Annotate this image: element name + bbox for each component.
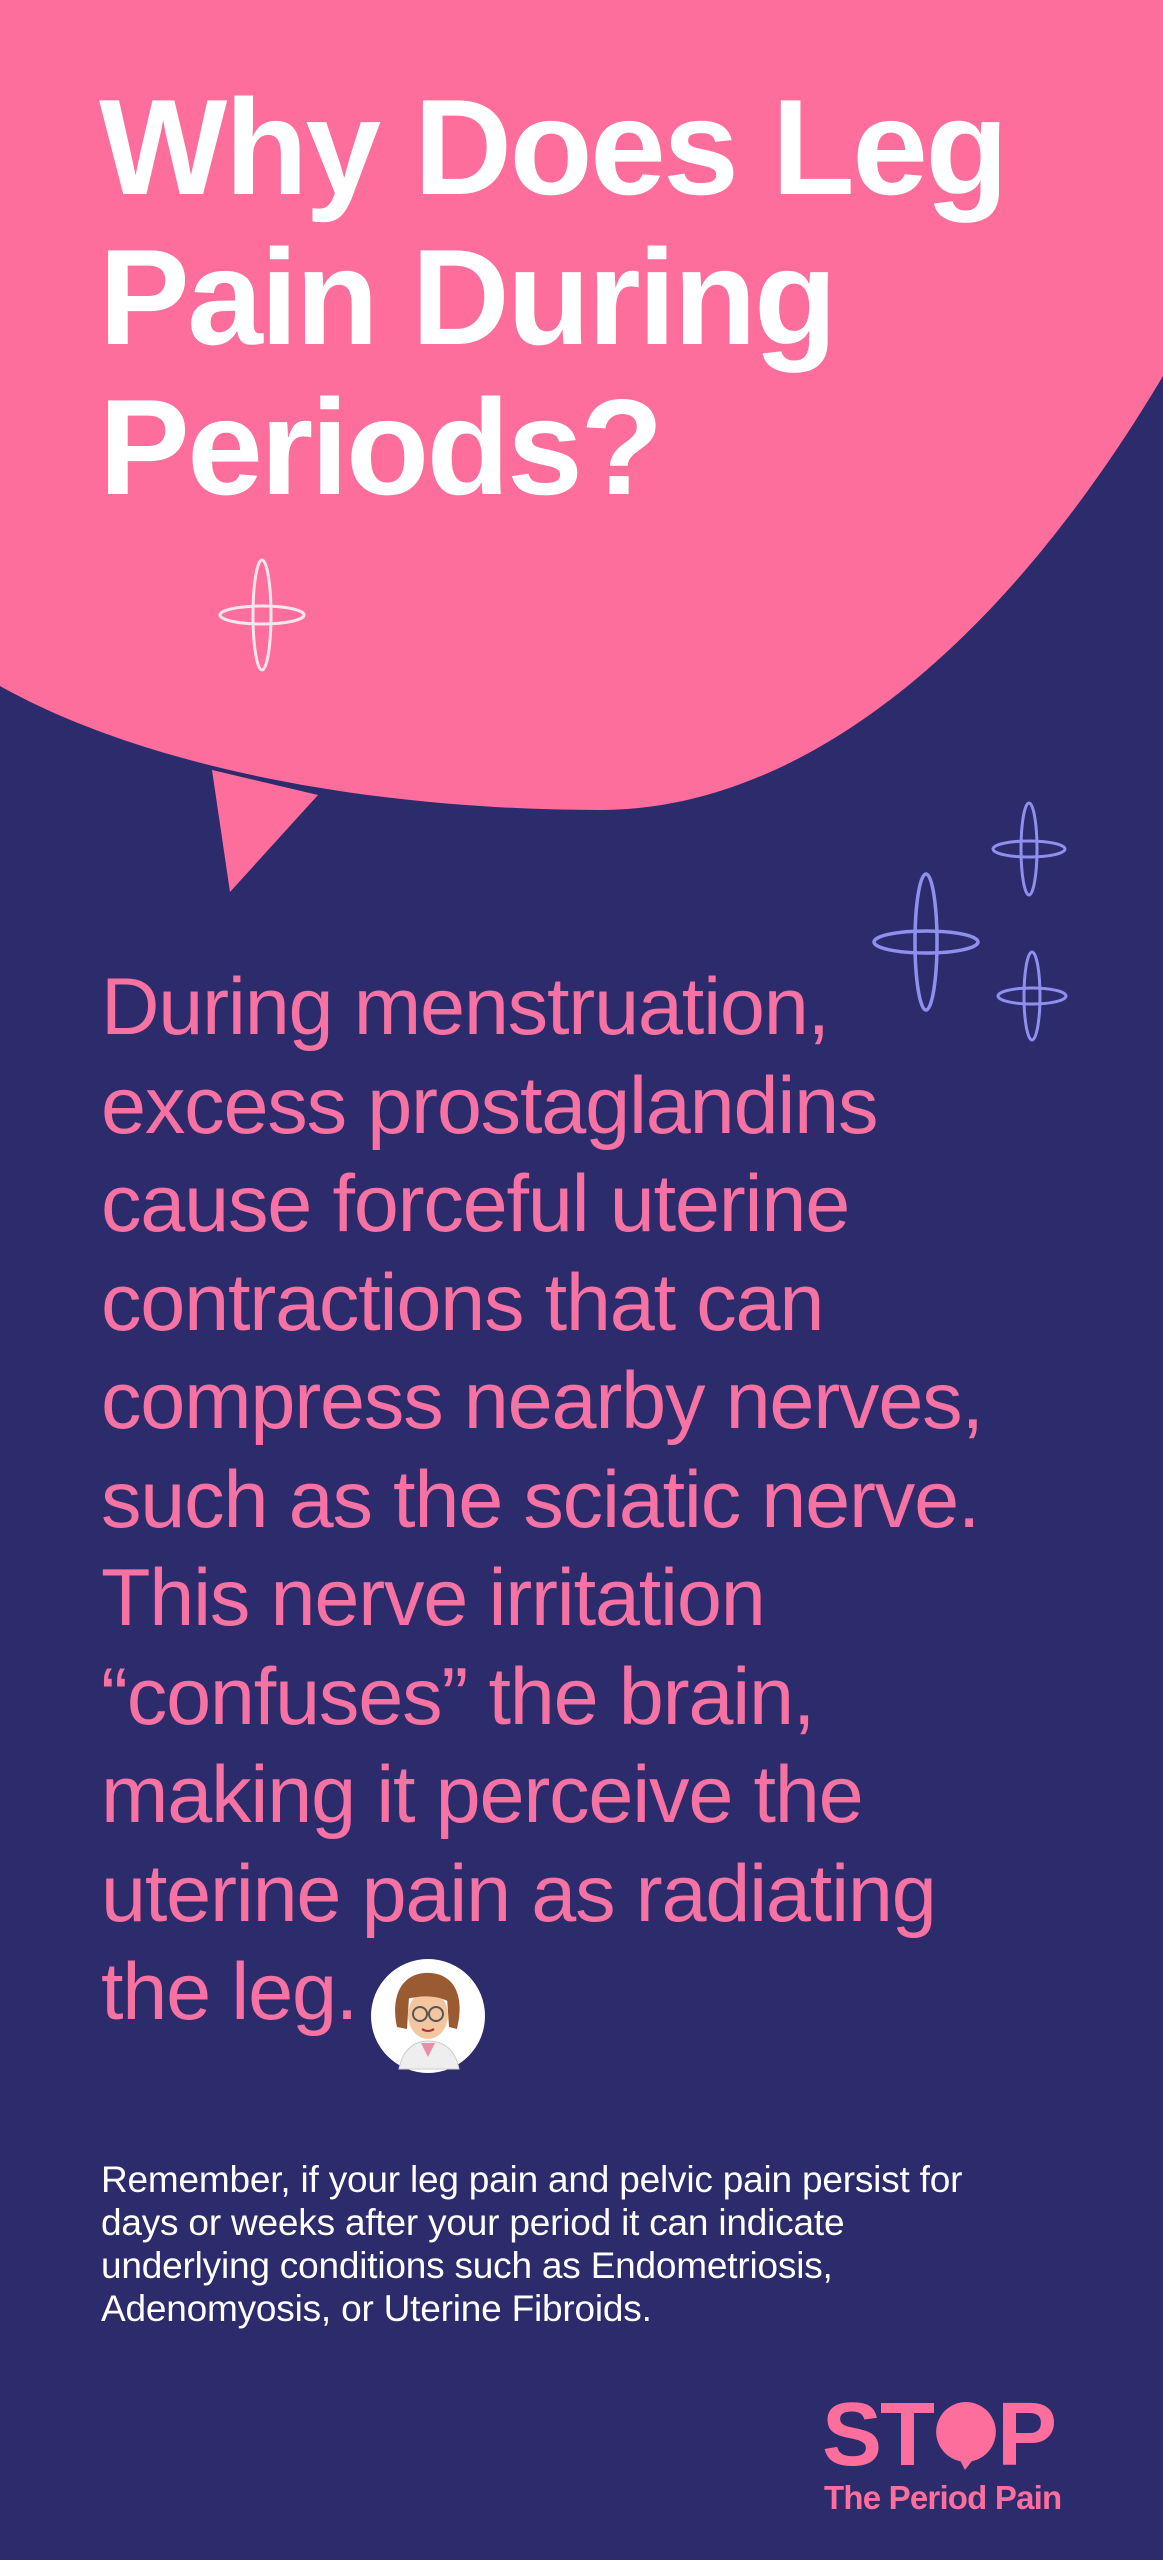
- main explanation text: contractions that can: [101, 1258, 823, 1348]
- title: Why Does Leg: [99, 71, 1006, 223]
- icon: sparkle small top: [993, 803, 1065, 895]
- footnote: Remember, if your leg pain and pelvic pain persist for: [101, 2159, 962, 2200]
- main explanation text: [101, 962, 983, 2037]
- main explanation text: This nerve irritation: [101, 1553, 765, 1643]
- main explanation text: making it perceive the: [101, 1750, 862, 1840]
- title: [99, 71, 1006, 523]
- title: Periods?: [99, 371, 661, 523]
- icon: sparkle small bottom: [998, 952, 1066, 1040]
- footnote: days or weeks after your period it can indicate: [101, 2202, 844, 2243]
- main explanation text: excess prostaglandins: [101, 1060, 877, 1150]
- logo: STOP The Period Pain: ST P: [822, 2385, 1055, 2485]
- main explanation text: compress nearby nerves,: [101, 1356, 983, 1446]
- logo: STOP The Period Pain: The Period Pain: [824, 2479, 1061, 2516]
- main explanation text: “confuses” the brain,: [101, 1652, 814, 1742]
- icon: speech bubble O: [936, 2402, 996, 2470]
- main explanation text: cause forceful uterine: [101, 1159, 849, 1249]
- footnote: underlying conditions such as Endometriosis,: [101, 2245, 833, 2286]
- main explanation text: During menstruation,: [101, 962, 829, 1052]
- icon: sparkle white in bubble: [220, 560, 304, 670]
- speech bubble: [0, 0, 1163, 892]
- main explanation text: such as the sciatic nerve.: [101, 1454, 979, 1544]
- icon: doctor avatar: [371, 1959, 485, 2073]
- main explanation text: the leg.: [101, 1947, 357, 2037]
- footnote: Adenomyosis, or Uterine Fibroids.: [101, 2288, 652, 2329]
- footnote: [101, 2159, 962, 2329]
- main explanation text: uterine pain as radiating: [101, 1848, 936, 1938]
- title: Pain During: [99, 221, 835, 373]
- icon: sparkle large: [874, 874, 978, 1010]
